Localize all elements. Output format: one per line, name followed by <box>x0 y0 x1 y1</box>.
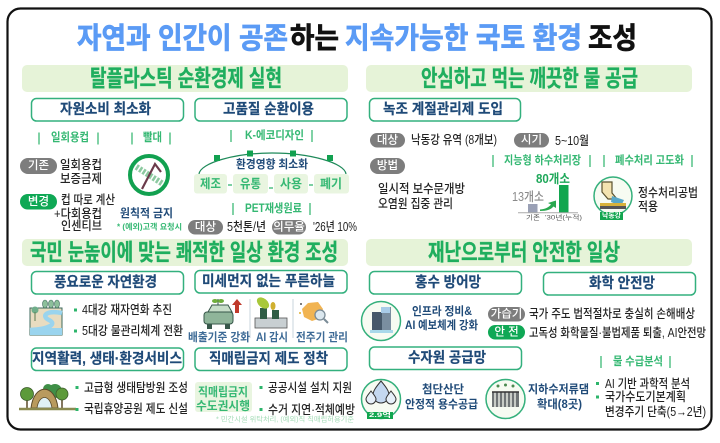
label: 일회용컵 <box>39 130 98 144</box>
text: 첨단산단 안정적 용수공급: 첨단산단 <box>422 382 464 396</box>
icon: underwater dam <box>486 380 525 418</box>
diagram: environmental impact lifecycle: 유통 <box>240 177 261 191</box>
section heading: 안심하고 먹는 깨끗한 물 공급 <box>421 65 638 91</box>
method: 오염원 집중 관리 <box>378 197 453 211</box>
divider <box>250 299 293 338</box>
title: 조성 <box>588 22 637 55</box>
callout: 직매립금지 수도권 시행: 직매립금지 <box>198 384 248 399</box>
text: 인프라 정비 & AI 예보체계 강화: AI 예보체계 강화 <box>405 318 478 332</box>
bullets: 4대강, 5대강 <box>74 302 183 338</box>
target and mandate: 의무율 <box>273 220 305 234</box>
label: 물 수급분석: 물 수급분석 <box>613 355 663 368</box>
target and mandate: 대상 <box>195 220 216 234</box>
icon: national park <box>19 384 76 409</box>
subheading: 자원소비 최소화 <box>32 98 184 121</box>
method <box>370 158 465 211</box>
panel: 안심하고 먹는 깨끗한 물 공급 <box>366 65 698 222</box>
period: 5~10월: 5~10월 <box>555 133 589 148</box>
section heading: 재난으로부터 안전한 일상 <box>428 239 620 265</box>
change: 컵 따로 계산: +다회용컵 <box>54 207 102 221</box>
subheading: 풍요로운 자연환경 <box>32 272 184 294</box>
icon: dust and magnifier <box>299 302 328 323</box>
panel: 탈플라스틱 순환경제 실현 <box>20 65 357 234</box>
subheading: 홍수 방어망 <box>370 272 522 294</box>
bullets: 물 수급분석: AI 기반 과학적 분석 <box>605 376 690 391</box>
callout: 직매립금지 수도권 시행 <box>195 382 252 413</box>
icon: water drops: 2.9억 <box>369 410 391 419</box>
title: 하는 <box>290 22 339 55</box>
bullets: 물 수급분석: 국가수도기본계획 <box>605 390 686 404</box>
subheading: 자원소비 최소화: 자원소비 최소화 <box>60 101 151 118</box>
subheading: 풍요로운 자연환경: 풍요로운 자연환경 <box>54 274 157 291</box>
note: 원칙적 금지 <box>117 206 182 232</box>
bar chart: 13개소 to 80개소: 기존 <box>526 212 540 222</box>
label: 지능형 하수처리장: 지능형 하수처리장 <box>504 153 581 167</box>
text: 정수처리공법 적용: 정수처리공법 <box>638 186 698 200</box>
subheading: 화학 안전망: 화학 안전망 <box>589 275 655 292</box>
diagram: environmental impact lifecycle: 환경영향 최소화 <box>236 157 308 171</box>
existing: 일회용컵 보증금제: 보증금제 <box>60 172 102 186</box>
section heading: 국민 눈높이에 맞는 쾌적한 일상 환경 조성 <box>30 239 338 265</box>
icon: river map <box>30 300 62 335</box>
target: 낙동강 유역: 대상 <box>377 132 398 146</box>
panel: 재난으로부터 안전한 일상 <box>362 239 706 419</box>
bar chart: 13개소 to 80개소 <box>512 172 582 222</box>
change: 컵 따로 계산 <box>20 193 115 233</box>
note: 원칙적 금지: * (예외)고객 요청시 <box>117 222 182 232</box>
footnote: * 민간시설 위탁처리, (예외)직 직매립허용기준 <box>216 414 355 424</box>
subheading: 미세먼지 없는 푸른하늘: 미세먼지 없는 푸른하늘 <box>202 273 335 290</box>
text: 정수처리공법 적용: 적용 <box>638 200 658 214</box>
section heading: 탈플라스틱 순환경제 실현 <box>90 65 282 91</box>
title: 자연과 인간이 공존 <box>77 22 288 55</box>
bullets: 4대강, 5대강: 4대강 재자연화 추진 <box>82 302 172 317</box>
bullets: 생태탐방원, 휴양공원: 국립휴양공원 제도 신설 <box>84 401 188 416</box>
bar chart: 13개소 to 80개소: 80개소 <box>536 172 570 186</box>
change: 컵 따로 계산: 인센티브 <box>61 219 102 233</box>
text: 지하수저류댐 확대: 확대(8곳) <box>537 397 582 411</box>
subheading: 녹조 계절관리제 도입: 녹조 계절관리제 도입 <box>383 101 503 118</box>
label: PET재생원료: PET재생원료 <box>245 201 302 215</box>
target and mandate: 5천톤/년 <box>227 219 266 234</box>
subheading: 미세먼지 없는 푸른하늘 <box>195 270 347 293</box>
target and mandate: '26년 10% <box>313 220 357 234</box>
text: 정수처리공법 적용 <box>638 186 698 214</box>
row: 안전: 안 전 <box>494 326 519 338</box>
text: 지하수저류댐 확대 <box>528 382 589 411</box>
label: 빨대 <box>132 130 170 144</box>
icon: car with sprout <box>204 299 242 329</box>
callout: 직매립금지 수도권 시행: 수도권시행 <box>196 398 250 413</box>
target: 낙동강 유역 <box>370 132 497 148</box>
subheading: 고품질 순환이용 <box>195 98 347 121</box>
labels: air quality measures: 배출기준 강화 <box>188 330 250 344</box>
row: 가습기 <box>488 307 695 322</box>
bullets: 4대강, 5대강: 5대강 물관리체계 전환 <box>82 324 183 338</box>
title: 지속가능한 국토 환경 <box>345 22 582 55</box>
method: 방법 <box>377 159 398 172</box>
change: 컵 따로 계산: 컵 따로 계산 <box>61 193 115 207</box>
note: 원칙적 금지: 원칙적 금지 <box>120 206 173 220</box>
subheading: 지역활력, 생태·환경서비스 <box>32 348 184 370</box>
icon: factory with leaf <box>255 295 287 328</box>
label: K-에코디자인: K-에코디자인 <box>245 129 304 142</box>
panel: 국민 눈높이에 맞는 쾌적한 일상 환경 조성 <box>19 239 355 424</box>
icon: 낙동강 water treatment <box>594 177 632 220</box>
icon: 낙동강 water treatment: 낙동강 <box>602 210 621 220</box>
icon: water drops <box>362 380 400 419</box>
diagram: environmental impact lifecycle: 사용 <box>280 177 302 191</box>
label: 폐수처리 고도화: 폐수처리 고도화 <box>615 153 684 167</box>
labels: air quality measures: 전주기 관리 <box>296 330 348 344</box>
subheading: 수자원 공급망 <box>370 347 522 370</box>
period: 5~10월: 시기 <box>521 134 542 146</box>
text: 인프라 정비 & AI 예보체계 강화 <box>405 305 478 332</box>
target and mandate <box>188 219 357 234</box>
subheading: 홍수 방어망: 홍수 방어망 <box>415 274 481 291</box>
subheading: 녹조 계절관리제 도입 <box>370 98 520 121</box>
diagram: environmental impact lifecycle: 제조 <box>200 176 221 191</box>
labels: air quality measures <box>188 330 348 344</box>
subheading: 화학 안전망 <box>544 272 696 295</box>
bullets: 생태탐방원, 휴양공원: 고급형 생태탐방원 조성 <box>84 380 188 395</box>
subheading: 고품질 순환이용: 고품질 순환이용 <box>223 101 314 118</box>
row: 가습기: 가습기 <box>491 308 522 320</box>
title <box>77 22 637 55</box>
text: 지하수저류댐 확대: 지하수저류댐 <box>528 382 589 396</box>
diagram: environmental impact lifecycle <box>194 150 349 194</box>
subheading: 직매립금지 제도 정착 <box>195 348 347 370</box>
text: 첨단산단 안정적 용수공급 <box>405 382 478 411</box>
text: 첨단산단 안정적 용수공급: 안정적 용수공급 <box>405 398 478 411</box>
existing: 일회용컵 보증금제: 일회용컵 <box>60 158 102 172</box>
change: 컵 따로 계산: 변경 <box>28 195 49 208</box>
labels: air quality measures: AI 감시 <box>256 331 288 344</box>
bar chart: 13개소 to 80개소: '30년(누적) <box>545 212 582 222</box>
bullets: 물 수급분석 <box>596 376 706 419</box>
period: 5~10월 <box>514 133 589 148</box>
bullets: 공공시설, 수거 지연: 공공시설 설치 지원 <box>268 381 352 395</box>
label: 일회용컵: 일회용컵 <box>51 130 89 144</box>
label: 빨대: 빨대 <box>143 130 162 144</box>
bullets: 공공시설, 수거 지연 <box>260 381 355 417</box>
existing: 일회용컵 보증금제 <box>20 158 102 186</box>
subheading: 수자원 공급망: 수자원 공급망 <box>408 350 486 366</box>
icon: straw ban <box>130 156 168 194</box>
icon: infrastructure building <box>362 302 400 340</box>
bullets: 생태탐방원, 휴양공원 <box>76 380 188 416</box>
bullets: 공공시설, 수거 지연: 수거 지연·적체예방 <box>268 403 355 417</box>
method: 일시적 보수문개방 <box>378 182 465 196</box>
diagram: environmental impact lifecycle: 폐기 <box>320 176 342 191</box>
bar chart: 13개소 to 80개소: 13개소 <box>512 190 544 204</box>
subheading: 직매립금지 제도 정착: 직매립금지 제도 정착 <box>209 350 328 368</box>
text: 인프라 정비 & AI 예보체계 강화: 인프라 정비& <box>412 305 472 318</box>
existing: 일회용컵 보증금제: 기존 <box>28 159 49 172</box>
target: 낙동강 유역: 낙동강 유역 (8개보) <box>411 133 497 147</box>
subheading: 지역활력, 생태·환경서비스: 지역활력, 생태·환경서비스 <box>32 350 182 368</box>
